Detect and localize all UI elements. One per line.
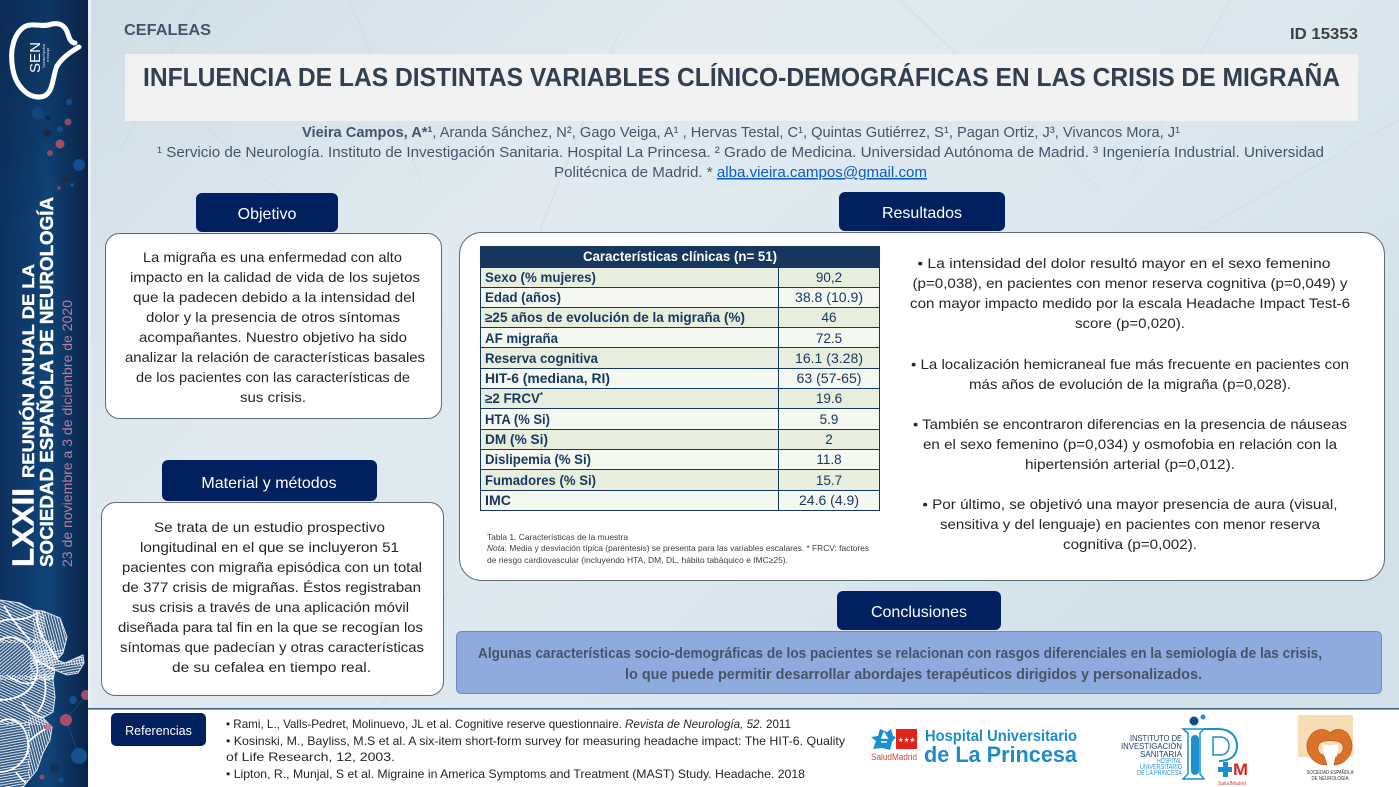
text block: objetivo: dolor y la presencia de otros síntomas [146, 309, 400, 325]
text block: references [226, 717, 845, 781]
text block: objetivo: acompañantes. Nuestro objetivo ha sido [139, 329, 407, 345]
text block: resultados: score (p=0,020). [1075, 315, 1185, 331]
heading: resultados [839, 192, 1005, 231]
heading: objetivo: Objetivo [238, 206, 296, 223]
logo: IIS Princesa: SANITARIA [1140, 749, 1182, 759]
logo: Hospital La Princesa: ★★★ [898, 736, 915, 744]
text block: material y métodos: Se trata de un estudio prospectivo [154, 519, 385, 535]
table: características clínicas: Características clínicas (n= 51) [583, 249, 777, 264]
text block: objetivo [125, 249, 425, 405]
logo: Sociedad Española de Neurología [1298, 715, 1354, 782]
panel: material y métodos [102, 460, 444, 696]
table: características clínicas: Edad (años) [485, 290, 561, 305]
table: características clínicas: 15.7 [816, 473, 842, 488]
text block: conclusiones [478, 646, 1322, 683]
text block: resultados [910, 255, 1350, 552]
table: características clínicas: DM (% Si) [485, 432, 548, 447]
authors and affiliations: Vieira Campos, A*¹, Aranda Sánchez, N², Gago Veiga, A¹ , Hervas Testal, C¹, Quintas Gutiérrez, S¹, Pagan Ortiz, J³, Vivancos Mora, J¹ [302, 124, 1180, 141]
table: características clínicas: Sexo (% mujeres) [485, 270, 596, 285]
table: características clínicas: 46 [821, 310, 837, 325]
icon: SEN logo: de Neurología [46, 48, 50, 62]
table: características clínicas: AF migraña [485, 331, 558, 346]
table: características clínicas: 19.6 [816, 391, 842, 406]
icon: molecule dots top [32, 99, 85, 190]
table: características clínicas: 11.8 [816, 452, 842, 467]
table note [487, 532, 869, 565]
text block: material y métodos: de 377 crisis de migrañas. Éstos registraban [122, 579, 421, 595]
table: características clínicas: Reserva cognitiva [485, 351, 598, 366]
panel: resultados [460, 192, 1384, 580]
logo: Hospital La Princesa: SaludMadrid [871, 752, 917, 762]
text block: resultados: sensitiva y del lenguaje) en pacientes con menor reserva [940, 516, 1320, 532]
authors and affiliations: Politécnica de Madrid. * alba.vieira.campos@gmail.com [554, 164, 927, 181]
logo: Hospital La Princesa [871, 728, 1078, 767]
table: características clínicas: ≥25 años de evolución de la migraña (%) [485, 310, 745, 325]
text block: objetivo: sus crisis. [240, 389, 306, 405]
heading: resultados: Resultados [882, 205, 962, 222]
table: características clínicas: HIT-6 (mediana, RI) [485, 371, 610, 386]
table note: de riesgo cardiovascular (incluyendo HTA, DM, DL, hábito tabáquico e IMC≥25). [487, 555, 788, 565]
authors and affiliations [157, 124, 1324, 181]
logo: IIS Princesa: M [1233, 760, 1248, 779]
table: características clínicas: Dislipemia (% Si) [485, 452, 591, 467]
text block: objetivo: La migraña es una enfermedad con alto [143, 249, 402, 265]
text block: material y métodos [118, 519, 424, 675]
text block: conclusiones: lo que puede permitir desarrollar abordajes terapéuticos dirigidos y personalizados. [625, 667, 1202, 683]
authors and affiliations: ¹ Servicio de Neurología. Instituto de Investigación Sanitaria. Hospital La Princesa. ² Grado de Medicina. Universidad Autónoma de Madrid. ³ Ingeniería Industrial. Universidad [157, 144, 1324, 161]
icon: brain illustration [0, 598, 88, 787]
table: características clínicas: 24.6 (4.9) [799, 493, 859, 508]
sidebar meeting title: SOCIEDAD ESPAÑOLA DE NEUROLOGÍA [36, 197, 57, 567]
title [125, 54, 1358, 121]
sidebar meeting title: REUNIÓN ANUAL DE LA [19, 264, 38, 478]
heading: referencias [111, 713, 206, 746]
logo: Hospital La Princesa: de La Princesa [924, 742, 1078, 767]
text block: resultados: • La localización hemicraneal fue más frecuente en pacientes con [911, 356, 1349, 372]
table: características clínicas: * [540, 391, 544, 400]
logo: Sociedad Española de Neurología: DE NEUROLOGÍA [1312, 775, 1349, 782]
logo: IIS Princesa: DE LA PRINCESA [1137, 770, 1182, 777]
heading: objetivo [196, 193, 338, 232]
text block: references: • Kosinski, M., Bayliss, M.S et al. A six-item short-form survey for measuring headache impact: The HIT-6. Quality [226, 734, 845, 748]
table note: Nota. Media y desviación típica (paréntesis) se presenta para las variables escalares. * FRCV: factores [487, 543, 869, 553]
table: características clínicas: 16.1 (3.28) [795, 351, 863, 366]
sidebar meeting title [12, 197, 72, 567]
icon: molecule dots bottom [40, 690, 91, 782]
table: características clínicas: 90,2 [816, 270, 842, 285]
table: características clínicas: 72.5 [816, 331, 842, 346]
text block: objetivo: impacto en la calidad de vida de los sujetos [130, 269, 420, 285]
table: características clínicas: IMC [485, 493, 511, 508]
logo: Sociedad Española de Neurología: SOCIEDAD ESPAÑOLA [1306, 769, 1354, 776]
text block: resultados: • También se encontraron diferencias en la presencia de náuseas [913, 416, 1347, 432]
logo: IIS Princesa [1121, 714, 1248, 787]
logo: IIS Princesa: INVESTIGACIÓN [1121, 741, 1182, 751]
table: características clínicas: 5.9 [820, 412, 838, 427]
text block: references: • Rami, L., Valls-Pedret, Molinuevo, JL et al. Cognitive reserve questionnaire. Revista de Neurología, 52. 2011 [226, 717, 791, 731]
text block: resultados: más años de evolución de la migraña (p=0,028). [969, 376, 1291, 392]
text block: references: of Life Research, 12, 2003. [226, 750, 395, 764]
logo: IIS Princesa: INSTITUTO DE [1130, 733, 1182, 743]
heading: conclusiones [837, 591, 1001, 630]
table: características clínicas: 2 [825, 432, 833, 447]
text block: resultados: hipertensión arterial (p=0,012). [1025, 456, 1235, 472]
section label: CEFALEAS: CEFALEAS [124, 22, 211, 39]
table: características clínicas: 38.8 (10.9) [795, 290, 863, 305]
table note: Tabla 1. Características de la muestra [487, 532, 628, 542]
heading: conclusiones: Conclusiones [871, 604, 967, 621]
sidebar meeting title: 23 de noviembre a 3 de diciembre de 2020 [60, 300, 75, 567]
text block: resultados: (p=0,038), en pacientes con menor reserva cognitiva (p=0,049) y [912, 275, 1348, 291]
text block: resultados: en el sexo femenino (p=0,034) y osmofobia en relación con la [923, 436, 1337, 452]
text block: objetivo: analizar la relación de características basales [125, 349, 425, 365]
text block: references: • Lipton, R., Munjal, S et al. Migraine in America Symptoms and Treatment (MAST) Study. Headache. 2018 [226, 767, 805, 781]
text block: conclusiones: Algunas características socio-demográficas de los pacientes se relacionan con rasgos diferenciales en la semiología de las crisis, [478, 646, 1322, 662]
text block: objetivo: de los pacientes con las características de [136, 369, 410, 385]
table: características clínicas: Fumadores (% Si) [485, 473, 596, 488]
text block: objetivo: que la padecen debido a la intensidad del [133, 289, 415, 305]
table: características clínicas: ≥2 FRCV [485, 391, 540, 406]
text block: material y métodos: de su cefalea en tiempo real. [172, 659, 371, 675]
left sidebar [0, 0, 91, 787]
title: INFLUENCIA DE LAS DISTINTAS VARIABLES CLÍNICO-DEMOGRÁFICAS EN LAS CRISIS DE MIGRAÑA [143, 62, 1340, 92]
heading: material y métodos [162, 460, 377, 501]
text block: material y métodos: longitudinal en el que se incluyeron 51 [140, 539, 399, 555]
table: características clínicas: 63 (57-65) [796, 371, 862, 386]
logo: IIS Princesa: SaludMadrid [1218, 781, 1246, 787]
sidebar meeting title: LXXII [6, 488, 40, 567]
logo: Hospital La Princesa: Hospital Universitario [925, 728, 1077, 745]
logo: IIS Princesa: UNIVERSITARIO [1140, 764, 1182, 771]
text block: material y métodos: sus crisis a través de una aplicación móvil [132, 599, 409, 615]
text block: resultados: • La intensidad del dolor resultó mayor en el sexo femenino [918, 255, 1331, 271]
icon: SEN logo: SEN [27, 42, 44, 73]
text block: material y métodos: síntomas que padecían y otras características [120, 639, 424, 655]
table: características clínicas [480, 246, 880, 510]
text block: resultados: • Por último, se objetivó una mayor presencia de aura (visual, [922, 496, 1338, 512]
text block: resultados: cognitiva (p=0,002). [1063, 536, 1197, 552]
text block: material y métodos: pacientes con migraña episódica con un total [122, 559, 422, 575]
logo: IIS Princesa: HOSPITAL [1157, 758, 1182, 765]
heading: material y métodos: Material y métodos [201, 475, 337, 492]
panel: conclusiones [456, 591, 1382, 694]
text block: resultados: con mayor impacto medido por la escala Headache Impact Test-6 [910, 295, 1350, 311]
table: características clínicas: HTA (% Si) [485, 412, 550, 427]
heading: referencias: Referencias [125, 724, 192, 738]
poster id: ID 15353 [1290, 26, 1358, 43]
icon: SEN logo [12, 24, 79, 97]
panel: objetivo [106, 193, 442, 418]
icon: SEN logo: Sociedad Española [42, 44, 46, 68]
text block: material y métodos: diseñada para tal fin en la que se recogían los [118, 619, 423, 635]
